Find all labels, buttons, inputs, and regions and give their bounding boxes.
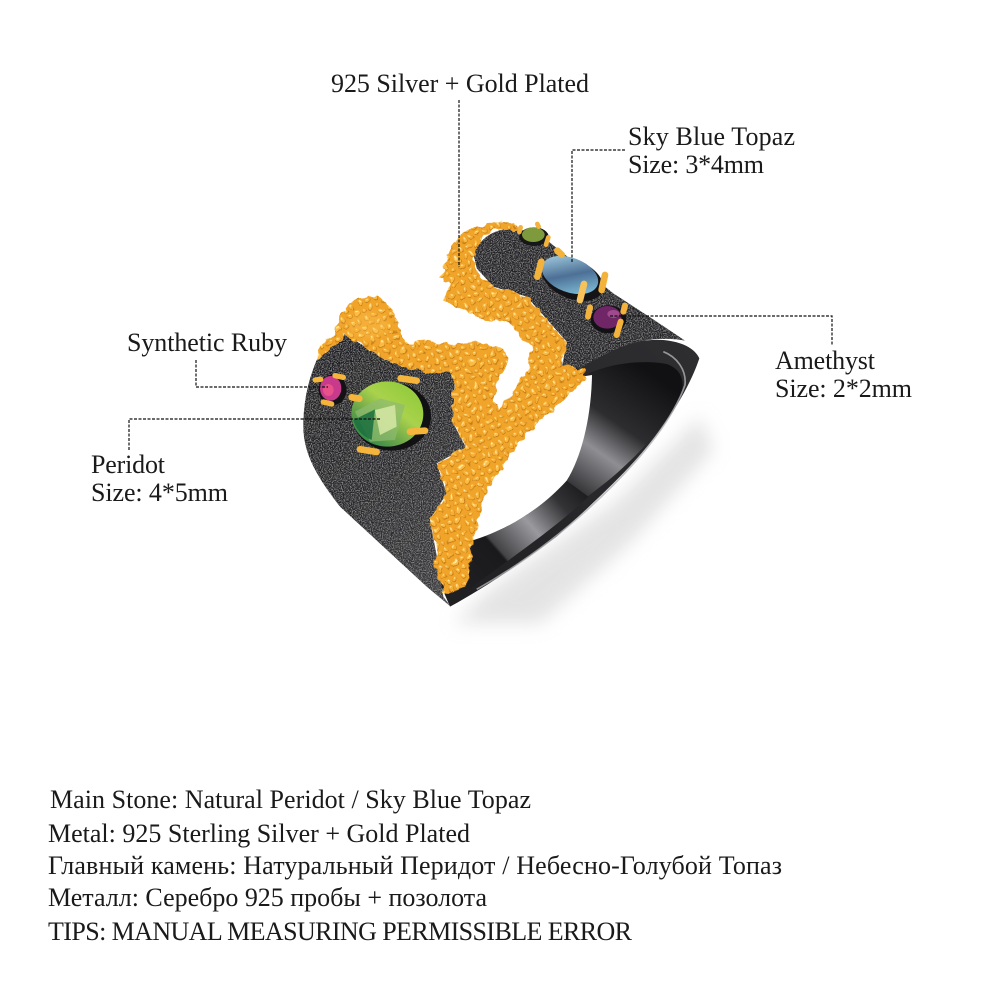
peridot facets <box>355 398 405 442</box>
metal line: Metal: 925 Sterling Silver + Gold Plated <box>48 819 470 848</box>
amethyst stone <box>588 305 626 335</box>
opening through the ring <box>472 375 592 541</box>
ruby highlight <box>323 384 334 396</box>
amethyst gem <box>593 306 621 329</box>
amethyst label name: Amethyst <box>775 346 876 375</box>
gold bright centre of left mound <box>348 312 388 338</box>
lower inner band surface <box>470 481 588 588</box>
callout: peridot <box>91 419 381 507</box>
band outer rim <box>440 340 699 607</box>
small green prongs <box>519 224 548 245</box>
ruby label: Synthetic Ruby <box>127 328 287 357</box>
tips line: TIPS: MANUAL MEASURING PERMISSIBLE ERROR <box>48 917 633 946</box>
main stone line: Main Stone: Natural Peridot / Sky Blue Topaz <box>50 785 531 814</box>
topaz label name: Sky Blue Topaz <box>628 122 795 151</box>
topaz leader line <box>572 150 625 263</box>
amethyst collet <box>590 305 626 333</box>
topaz label size: Size: 3*4mm <box>628 150 764 179</box>
small green collet <box>519 227 549 246</box>
metal label: 925 Silver + Gold Plated <box>331 69 589 98</box>
topaz collet <box>536 249 610 309</box>
russian main stone line: Главный камень: Натуральный Перидот / Небесно-Голубой Топаз <box>48 851 782 880</box>
ruby gem <box>320 376 341 401</box>
peridot collet shadow <box>352 383 431 451</box>
callout: synthetic ruby <box>127 328 328 387</box>
topaz gem <box>537 249 603 301</box>
callout: sky blue topaz <box>572 122 795 263</box>
ring product illustration <box>303 222 713 623</box>
amethyst highlight <box>607 310 619 318</box>
russian metal line: Металл: Серебро 925 пробы + позолота <box>48 883 487 912</box>
ruby prongs <box>315 376 343 404</box>
left textured black face <box>303 333 466 607</box>
metal leader line <box>458 100 460 267</box>
peridot label size: Size: 4*5mm <box>91 478 228 507</box>
peridot highlight <box>375 405 397 435</box>
small green gem <box>522 227 545 242</box>
peridot dark facet <box>353 409 375 440</box>
sky blue topaz stone <box>536 249 610 309</box>
amethyst label size: Size: 2*2mm <box>775 374 912 403</box>
gold surface <box>317 222 585 593</box>
band inner surface <box>467 362 683 587</box>
small green stone <box>519 224 549 246</box>
peridot stone with setting <box>351 378 431 452</box>
ruby collet <box>319 375 347 405</box>
peridot label name: Peridot <box>91 450 166 479</box>
callout: amethyst <box>610 316 912 403</box>
amethyst prongs <box>588 306 625 335</box>
peridot gem <box>351 381 423 447</box>
ruby leader line <box>196 360 328 387</box>
gold beaded edge <box>317 222 585 593</box>
peridot prongs <box>352 378 425 452</box>
cast shadow <box>453 417 713 623</box>
synthetic ruby stone <box>315 375 347 405</box>
topaz prongs <box>537 251 605 300</box>
rim highlight <box>477 352 685 589</box>
right textured black face <box>473 229 685 368</box>
peridot leader line <box>129 419 381 450</box>
product specification text <box>48 785 782 946</box>
amethyst leader line <box>610 316 832 345</box>
